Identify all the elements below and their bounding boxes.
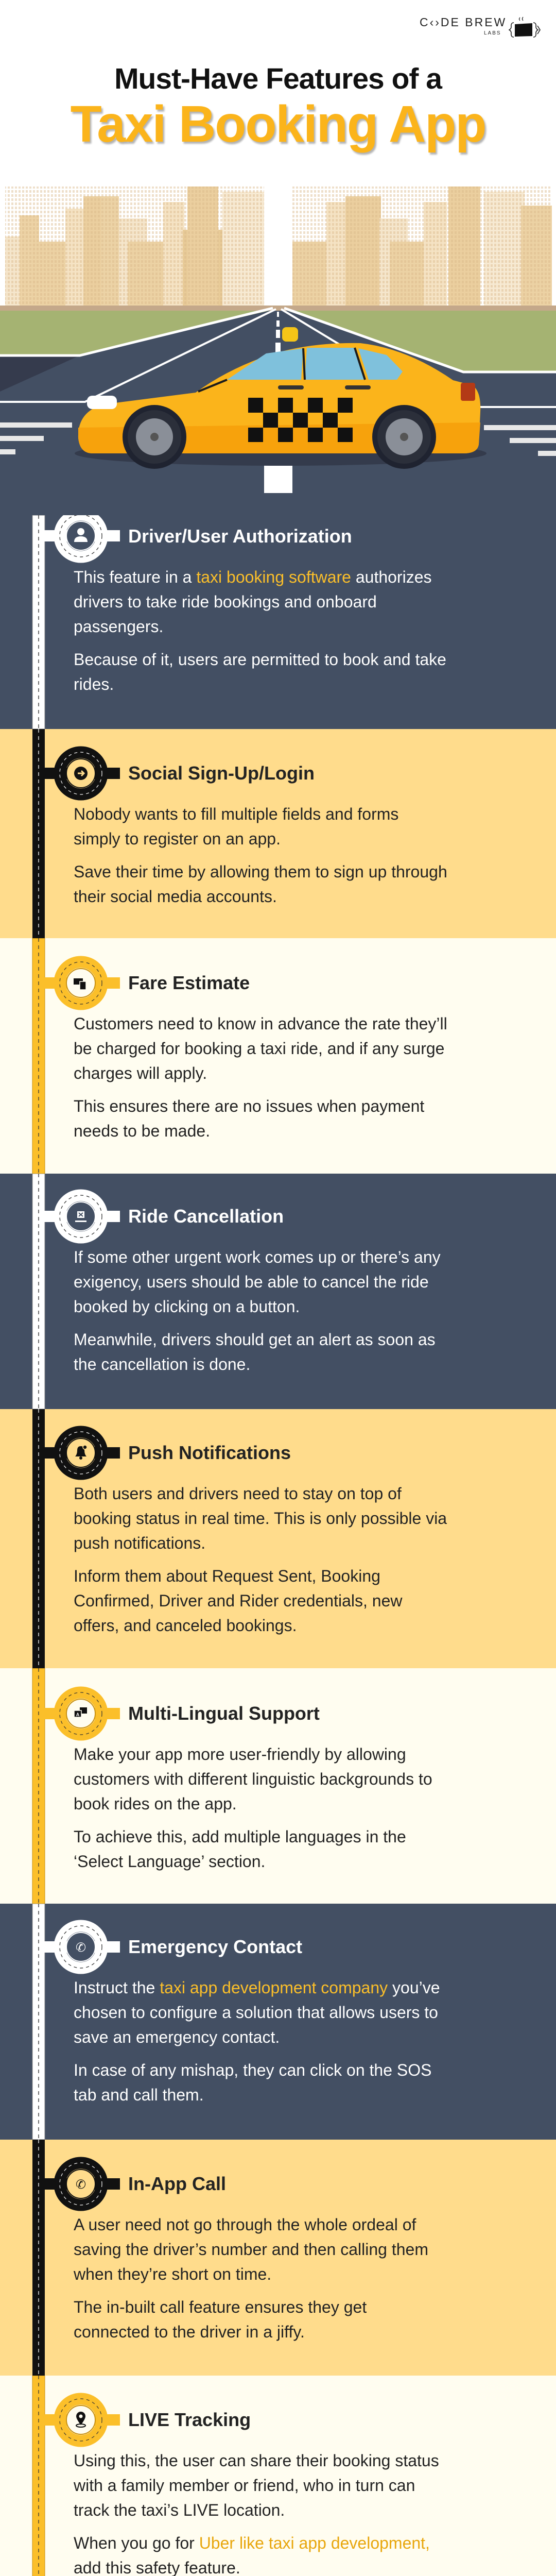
panel: in-app call: ✆ (76, 2177, 86, 2192)
text: Make your app more user-friendly by allowing (74, 1745, 406, 1764)
panel: in-app call (0, 2140, 556, 2376)
text: Nobody wants to fill multiple fields and forms (74, 805, 398, 823)
text: tab and call them. (74, 2086, 204, 2104)
text: This ensures there are no issues when payment (74, 1097, 424, 1115)
text: be charged for booking a taxi ride, and if any surge (74, 1039, 444, 1058)
panel: fare estimate (0, 938, 556, 1174)
title (71, 62, 487, 156)
panel: social sign-up (0, 729, 556, 938)
panel: multi-lingual support (0, 1668, 556, 1904)
text: Customers need to know in advance the rate they’ll (74, 1014, 447, 1033)
text: their social media accounts. (74, 887, 277, 906)
heading: In-App Call (128, 2173, 226, 2194)
panel: live tracking (0, 2376, 556, 2576)
heading: Push Notifications (128, 1442, 291, 1463)
text: save an emergency contact. (74, 2028, 280, 2046)
text: The in-built call feature ensures they get (74, 2298, 367, 2316)
text: when they’re short on time. (74, 2265, 271, 2283)
text (74, 568, 446, 693)
panel: emergency contact (0, 1904, 556, 2140)
text: Using this, the user can share their booking status (74, 2451, 439, 2470)
heading: Social Sign-Up/Login (128, 762, 315, 784)
panel: ride cancellation (0, 1174, 556, 1409)
text: with a family member or friend, who in turn can (74, 2476, 415, 2495)
text (74, 2451, 439, 2576)
text: rides. (74, 675, 114, 693)
text: When you go for Uber like taxi app development, (74, 2534, 430, 2552)
text: chosen to configure a solution that allows users to (74, 2003, 438, 2022)
text: book rides on the app. (74, 1794, 237, 1813)
logo: C‹›DE BREW (420, 15, 507, 29)
text: booked by clicking on a button. (74, 1297, 300, 1316)
text: Instruct the taxi app development company you’ve (74, 1978, 440, 1997)
text (74, 1014, 447, 1140)
panel: multi-lingual support: A (76, 1712, 80, 1717)
heading: Emergency Contact (128, 1936, 302, 1957)
panel: push notifications (0, 1409, 556, 1668)
text: needs to be made. (74, 1122, 210, 1140)
text: connected to the driver in a jiffy. (74, 2323, 305, 2341)
text: This feature in a taxi booking software authorizes (74, 568, 431, 586)
text: If some other urgent work comes up or there’s any (74, 1248, 441, 1266)
text: push notifications. (74, 1534, 205, 1552)
text: To achieve this, add multiple languages in the (74, 1827, 406, 1846)
text: saving the driver’s number and then calling them (74, 2240, 428, 2259)
header (0, 0, 556, 515)
title: Must-Have Features of a (114, 62, 442, 95)
text: simply to register on an app. (74, 829, 281, 848)
heading: Fare Estimate (128, 972, 250, 993)
heading: Ride Cancellation (128, 1206, 284, 1227)
text (74, 1248, 441, 1374)
text: A user need not go through the whole ordeal of (74, 2215, 416, 2234)
text: Because of it, users are permitted to book and take (74, 650, 446, 669)
logo (420, 15, 541, 38)
text: In case of any mishap, they can click on the SOS (74, 2061, 431, 2079)
text (74, 1978, 440, 2104)
text (74, 1745, 432, 1871)
taxi (75, 327, 486, 469)
text (74, 1484, 447, 1635)
text: track the taxi’s LIVE location. (74, 2501, 285, 2519)
text: Both users and drivers need to stay on top of (74, 1484, 402, 1503)
text (74, 2215, 428, 2341)
heading: Driver/User Authorization (128, 526, 352, 547)
panel: driver/user authorization (0, 515, 556, 729)
phone mockups (0, 2376, 556, 2576)
text: the cancellation is done. (74, 1355, 250, 1374)
text: passengers. (74, 617, 163, 636)
text (74, 805, 447, 906)
text: Confirmed, Driver and Rider credentials, new (74, 1591, 402, 1610)
text: charges will apply. (74, 1064, 207, 1082)
text: offers, and canceled bookings. (74, 1616, 297, 1635)
logo: LABS (484, 30, 501, 36)
text: Inform them about Request Sent, Booking (74, 1567, 380, 1585)
text: Save their time by allowing them to sign up through (74, 862, 447, 881)
text: Meanwhile, drivers should get an alert as soon as (74, 1330, 436, 1349)
heading: LIVE Tracking (128, 2409, 251, 2430)
text: booking status in real time. This is only possible via (74, 1509, 447, 1528)
text: drivers to take ride bookings and onboard (74, 592, 377, 611)
title: Taxi Booking App (71, 95, 485, 153)
text: exigency, users should be able to cancel the ride (74, 1273, 429, 1291)
heading: Multi-Lingual Support (128, 1703, 320, 1724)
text: customers with different linguistic backgrounds to (74, 1770, 432, 1788)
panel: emergency contact: ✆ (76, 1940, 86, 1955)
illustration: city road and taxi (0, 187, 556, 515)
text: ‘Select Language’ section. (74, 1852, 265, 1871)
